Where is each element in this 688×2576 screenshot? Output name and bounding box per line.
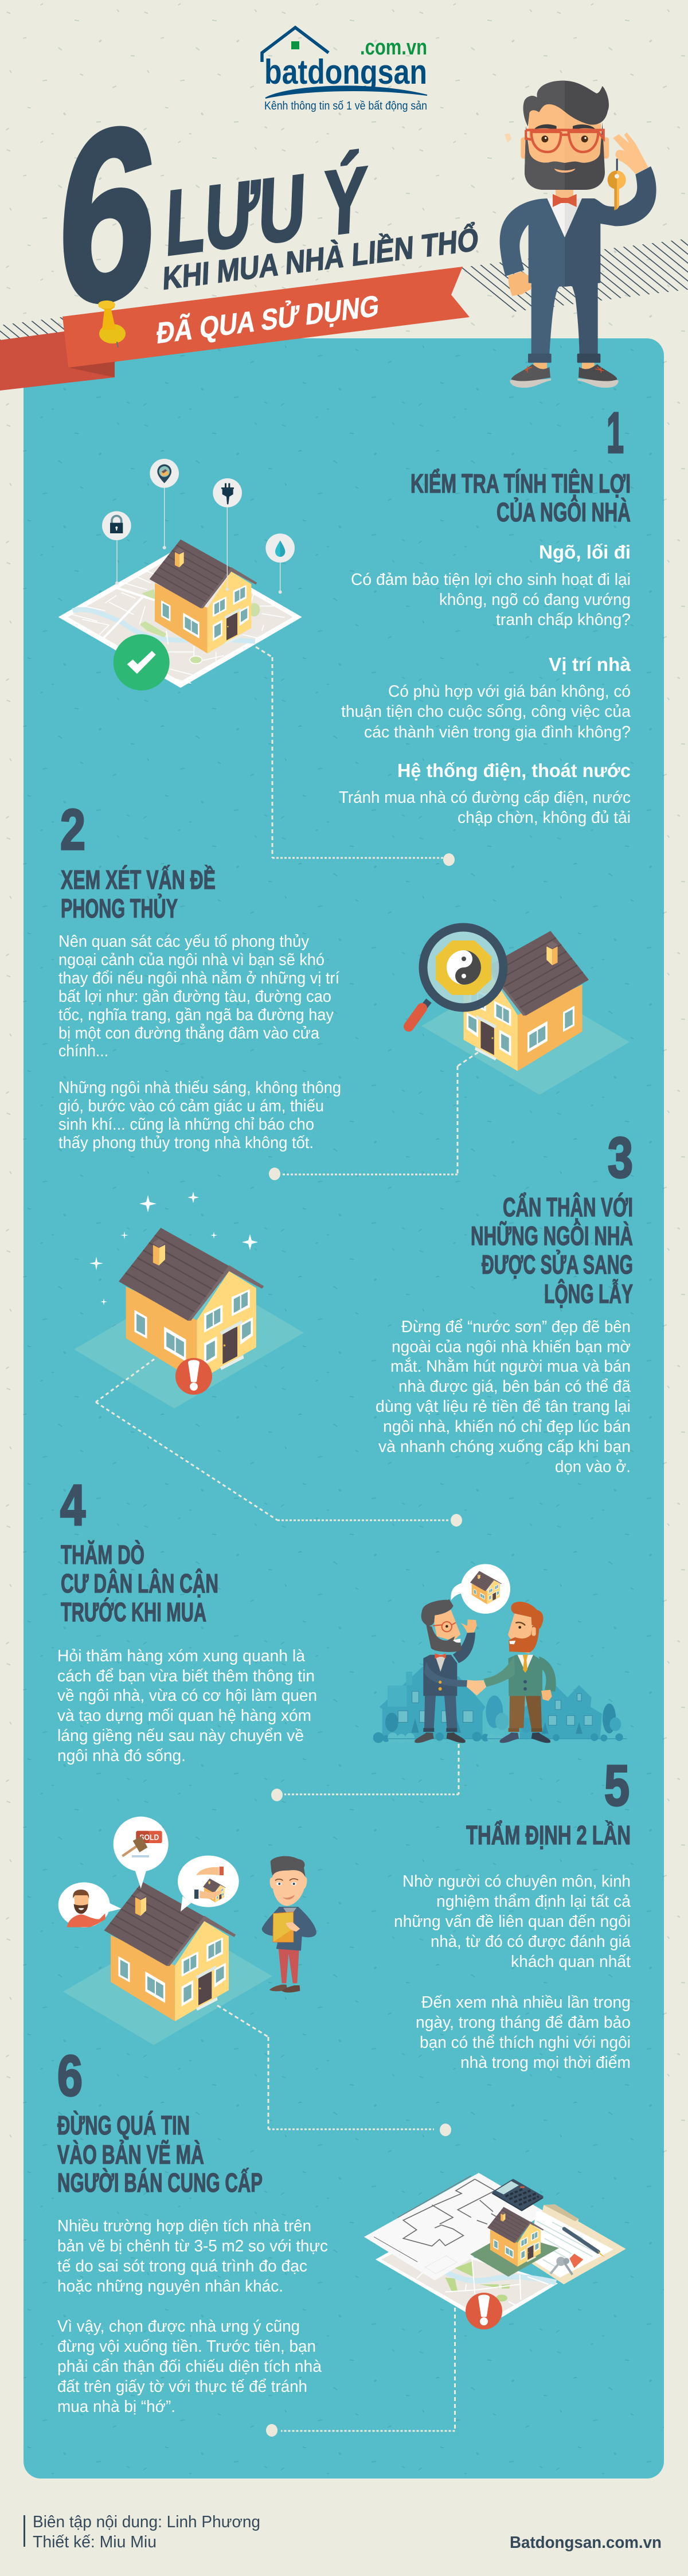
body: phong thủy paragraph 1: tốc, nghĩa trang, gần ngã ba đường hay — [58, 1006, 334, 1024]
icon: push pin — [98, 300, 126, 348]
body: hỏi thăm hàng xóm: cách để bạn vừa biết thêm thông tin — [57, 1667, 315, 1685]
body: phong thủy paragraph 1: bất lợi như: gần đường tàu, đường cao — [58, 988, 331, 1006]
connector: section 4 to 5 — [271, 1744, 459, 1801]
man: ears — [521, 137, 609, 159]
section 2 — [58, 798, 630, 1180]
shadow diamond — [421, 973, 630, 1095]
body: bản vẽ paragraph 2: mua nhà bị “hớ”. — [57, 2398, 175, 2416]
body: nước sơn: mắt. Nhằm hút người mua và bán — [390, 1357, 631, 1376]
calculator — [491, 2179, 544, 2211]
heading: kiểm tra tính tiện lợi — [411, 469, 631, 527]
body: nước sơn: và nhanh chóng xuống cấp khi bạn — [378, 1438, 631, 1456]
man: bow tie — [553, 194, 577, 207]
body: phong thủy paragraph 2: sinh khí... cũng là những chỉ báo cho — [58, 1115, 314, 1134]
body: nước sơn: Đừng để “nước sơn” đẹp đẽ bên — [401, 1318, 631, 1336]
house — [104, 1882, 236, 2021]
sub-block: hệ thống điện, thoát nước: Hệ thống điện, thoát nước — [397, 760, 631, 781]
connector: section 2 to 3 — [269, 1052, 478, 1180]
illustration: house on map with utility pins — [58, 459, 302, 690]
footer website: Batdongsan.com.vn — [510, 2534, 662, 2552]
body: bản vẽ paragraph 2: đừng vội xuống tiền. Trước tiên, bạn — [57, 2337, 316, 2356]
shadow diamond — [63, 1923, 272, 2045]
body: hỏi thăm hàng xóm: láng giềng nếu sau này chuyển về — [57, 1727, 304, 1745]
body: thẩm định paragraph 1: nghiệm thẩm định lại tất cả — [436, 1892, 631, 1911]
icon: magnifier with bagua — [409, 927, 503, 1027]
body: thẩm định paragraph 2: ngày, trong tháng để đảm bảo — [416, 2013, 631, 2032]
connector: section 5 to 6 — [217, 2005, 451, 2136]
body: thẩm định paragraph 2: Đến xem nhà nhiều lần trong — [421, 1993, 631, 2012]
man: hair — [523, 81, 609, 126]
footer credits: Thiết kế: Miu Miu — [33, 2533, 157, 2551]
man: face — [529, 104, 601, 165]
main teal panel — [24, 338, 664, 2479]
house — [456, 931, 589, 1071]
number 1: 1 — [607, 401, 624, 465]
speech bubble with house — [451, 1564, 510, 1614]
floor plan sheet — [364, 2173, 546, 2281]
body: phong thủy paragraph 2 — [58, 1079, 341, 1152]
heading: xem xét vấn đề phong thủy: PHONG THỦY — [61, 893, 178, 923]
icon: water drop — [265, 533, 295, 563]
body: phong thủy paragraph 1: chính... — [58, 1042, 108, 1060]
heading: thăm dò cư dân lân cận: TRƯỚC KHI MUA — [61, 1597, 206, 1627]
body: nước sơn — [376, 1318, 631, 1476]
footer credits — [24, 2513, 260, 2551]
body: thẩm định paragraph 2: bạn có thể thích nghi với ngôi — [420, 2034, 631, 2052]
icon: location pin — [150, 459, 179, 488]
illustration: magnifier over house — [409, 927, 630, 1095]
body: bản vẽ paragraph 1 — [57, 2217, 328, 2296]
keys — [550, 2254, 583, 2275]
footer credits: Biên tập nội dung: Linh Phương — [33, 2513, 260, 2531]
icon: key — [608, 159, 626, 210]
man: eyebrows — [534, 124, 595, 130]
body: bản vẽ paragraph 2: phải cẩn thận đối chiếu diện tích nhà — [57, 2358, 322, 2376]
heading: thăm dò cư dân lân cận: THĂM DÒ — [61, 1540, 144, 1570]
bubble: bearded man — [58, 1882, 122, 1927]
logo: tagline: Kênh thông tin số 1 về bất động sản — [264, 100, 427, 112]
body: thẩm định paragraph 1: Nhờ người có chuyên môn, kinh — [402, 1872, 631, 1891]
sub-block: hệ thống điện, thoát nước: chập chờn, không đủ tải — [458, 809, 631, 827]
heading: xem xét vấn đề phong thủy — [61, 865, 216, 923]
man: glasses — [526, 130, 604, 152]
body: thẩm định paragraph 1 — [394, 1872, 631, 1971]
background houses — [373, 1667, 627, 1743]
body: thẩm định paragraph 1: nhà, từ đó có được đánh giá — [431, 1933, 631, 1951]
heading: đừng quá tin: VÀO BẢN VẼ MÀ — [57, 2140, 204, 2169]
heading: đừng quá tin: NGƯỜI BÁN CUNG CẤP — [57, 2168, 263, 2198]
heading: kiểm tra tính tiện lợi: CỦA NGÔI NHÀ — [497, 497, 631, 527]
house — [150, 540, 257, 653]
number 4: 4 — [60, 1473, 85, 1537]
heading: cẩn thận với những ngôi nhà được sửa sang lộng lẫy — [471, 1192, 633, 1309]
body: bản vẽ paragraph 2: đất trên giấy tờ với thực tế để tránh — [57, 2378, 307, 2396]
pin lines — [116, 487, 282, 594]
man: left neighbour — [415, 1599, 477, 1743]
body: thẩm định paragraph 2: nhà trong mọi thời điểm — [460, 2054, 631, 2072]
icon: alert — [466, 2293, 502, 2329]
heading: cẩn thận với những ngôi nhà được sửa sang lộng lẫy: LỘNG LẪY — [544, 1279, 633, 1309]
section 3 — [74, 1126, 633, 1527]
pen — [564, 2229, 605, 2257]
body: nước sơn: dùng vật liệu rẻ tiền để tân trang lại — [376, 1398, 631, 1416]
section 5 — [58, 1754, 631, 2136]
body: thẩm định paragraph 1: những vấn đề liên quan đến ngôi — [394, 1913, 631, 1931]
heading: thăm dò cư dân lân cận — [61, 1540, 218, 1627]
logo: window — [291, 41, 299, 49]
icon: alert — [175, 1358, 212, 1395]
sub-block: hệ thống điện, thoát nước — [339, 760, 631, 827]
heading: đừng quá tin: ĐỪNG QUÁ TIN — [57, 2110, 190, 2140]
body: thẩm định paragraph 1: khách quan nhất — [511, 1953, 631, 1971]
ribbon text: ĐÃ QUA SỬ DỤNG — [155, 289, 381, 350]
body: bản vẽ paragraph 2: Vì vậy, chọn được nhà ưng ý cũng — [57, 2317, 300, 2336]
logo: domain: .com.vn — [360, 36, 427, 60]
sub-block: vị trí nhà: các thành viên trong gia đình không? — [364, 723, 631, 741]
illustration: two neighbours shaking hands — [373, 1564, 627, 1743]
sub-block: ngõ, lối đi: không, ngõ có đang vướng — [439, 591, 631, 609]
hatched strip: left — [0, 317, 66, 341]
shadow diamond — [74, 1274, 304, 1408]
body: phong thủy paragraph 1: Nên quan sát các yếu tố phong thủy — [58, 932, 309, 951]
sub-block: ngõ, lối đi: Có đảm bảo tiện lợi cho sinh hoạt đi lại — [351, 571, 631, 589]
section 1 — [58, 401, 631, 866]
body: bản vẽ paragraph 1: tế do sai sót trong quá trình đo đạc — [57, 2257, 307, 2276]
body: hỏi thăm hàng xóm — [57, 1647, 317, 1765]
section 4 — [57, 1473, 627, 1801]
character: man with key — [500, 81, 656, 388]
sub-block: vị trí nhà — [341, 654, 631, 741]
number 2: 2 — [60, 798, 85, 862]
map sheet — [376, 2238, 558, 2323]
body: thẩm định paragraph 2 — [416, 1993, 631, 2072]
icon: lock — [102, 511, 131, 540]
bubble: sold gavel — [114, 1817, 169, 1888]
connector: section 1 to 2 — [256, 647, 455, 866]
body: bản vẽ paragraph 2 — [57, 2317, 322, 2416]
man: neck — [556, 189, 573, 199]
connector: section 3 to 4 — [96, 1359, 462, 1527]
sub-block: vị trí nhà: thuận tiện cho cuộc sống, công việc của — [341, 702, 631, 721]
body: phong thủy paragraph 2: thấy phong thủy trong nhà không tốt. — [58, 1134, 314, 1152]
man: beard — [525, 122, 605, 190]
body: bản vẽ paragraph 1: bản vẽ bị chênh từ 3-5 m2 so với thực — [57, 2237, 328, 2255]
man: right neighbour — [484, 1602, 556, 1743]
man: left hand — [509, 271, 531, 296]
map — [58, 547, 302, 688]
body: hỏi thăm hàng xóm: về ngôi nhà, vừa có cơ hội làm quen — [57, 1687, 317, 1705]
body: phong thủy paragraph 1: bị một con đường thẳng đâm vào cửa — [58, 1023, 320, 1043]
body: bản vẽ paragraph 1: hoặc những nguyên nhân khác. — [57, 2277, 283, 2296]
illustration: sparkling house — [74, 1192, 304, 1408]
number 5: 5 — [604, 1754, 630, 1818]
house — [487, 2207, 544, 2266]
sub-block: vị trí nhà: Có phù hợp với giá bán không, có — [388, 682, 631, 701]
connector: section 6 to end — [266, 2308, 455, 2437]
icon: plug — [213, 478, 242, 508]
body: phong thủy paragraph 1: ngoại cảnh của ngôi nhà vì bạn sẽ khó — [58, 951, 325, 969]
sparkles — [89, 1192, 258, 1305]
clipboard — [527, 2204, 626, 2284]
man: right hand — [613, 132, 648, 174]
man: mouth — [554, 169, 575, 173]
man: eyes — [541, 135, 588, 142]
logo: swoosh — [265, 86, 427, 98]
bubble: sold gavel: SOLD — [139, 1833, 159, 1842]
logo — [262, 28, 427, 112]
body: hỏi thăm hàng xóm: và tạo dựng mối quan hệ hàng xóm — [57, 1707, 311, 1725]
heading: thăm dò cư dân lân cận: CƯ DÂN LÂN CẬN — [61, 1568, 218, 1598]
body: phong thủy paragraph 1: thay đổi nếu ngôi nhà nằm ở những vị trí — [58, 969, 339, 988]
green lot diamond — [470, 2232, 559, 2277]
man: right arm and torso — [565, 166, 656, 287]
body: bản vẽ paragraph 1: Nhiều trường hợp diện tích nhà trên — [57, 2217, 311, 2235]
sub-block: vị trí nhà: Vị trí nhà — [549, 654, 631, 675]
sub-block: ngõ, lối đi: tranh chấp không? — [496, 611, 631, 629]
body: nước sơn: ngôi nhà, khiến nó chỉ đẹp lúc bán — [383, 1418, 631, 1436]
bubble: house in hands — [178, 1856, 239, 1911]
ribbon — [0, 267, 470, 391]
house — [119, 1228, 264, 1381]
body: nước sơn: nhà được giá, bên bán có thể đã — [398, 1377, 631, 1396]
body: phong thủy paragraph 2: gió, bước vào có cảm giác u ám, thiếu — [58, 1097, 324, 1115]
logo: house outline — [262, 28, 329, 62]
number 3: 3 — [608, 1126, 633, 1190]
sub-block: ngõ, lối đi: Ngõ, lối đi — [539, 541, 631, 563]
handshake — [467, 1680, 486, 1696]
sub-block: hệ thống điện, thoát nước: Tránh mua nhà có đường cấp điện, nước — [339, 789, 631, 807]
man: legs — [528, 282, 600, 370]
hatched strip: right — [453, 239, 688, 313]
body: nước sơn: ngoài của ngôi nhà khiến bạn mờ — [392, 1338, 631, 1356]
illustration: house with speech bubbles and agent — [58, 1817, 316, 2045]
man: shirt — [547, 198, 565, 237]
sub-block: ngõ, lối đi — [351, 541, 631, 629]
illustration: map, floor plan, clipboard, house — [364, 2173, 626, 2323]
man: shoes — [510, 364, 619, 388]
title: big number 6: 6 — [52, 73, 163, 357]
body: phong thủy paragraph 2: Những ngôi nhà thiếu sáng, không thông — [58, 1079, 341, 1097]
icon: green check badge — [114, 634, 170, 690]
man: stray highlight — [505, 134, 511, 143]
heading: xem xét vấn đề phong thủy: XEM XÉT VẤN ĐỀ — [61, 865, 216, 895]
body: hỏi thăm hàng xóm: ngôi nhà đó sống. — [57, 1747, 186, 1765]
body: nước sơn: dọn vào ở. — [555, 1458, 631, 1476]
agent character — [262, 1856, 316, 1993]
body: phong thủy paragraph 1 — [58, 932, 339, 1060]
title: LƯU Ý: LƯU Ý — [164, 148, 369, 275]
logo: wordmark: batdongsan — [264, 53, 427, 91]
body: hỏi thăm hàng xóm: Hỏi thăm hàng xóm xung quanh là — [57, 1647, 306, 1665]
number 6: 6 — [57, 2044, 83, 2108]
title: khi mua nhà liền thổ: KHI MUA NHÀ LIỀN THỔ — [162, 221, 479, 296]
section 6 — [57, 2044, 626, 2437]
heading: đừng quá tin — [57, 2110, 263, 2198]
man: left arm and torso — [500, 198, 565, 287]
